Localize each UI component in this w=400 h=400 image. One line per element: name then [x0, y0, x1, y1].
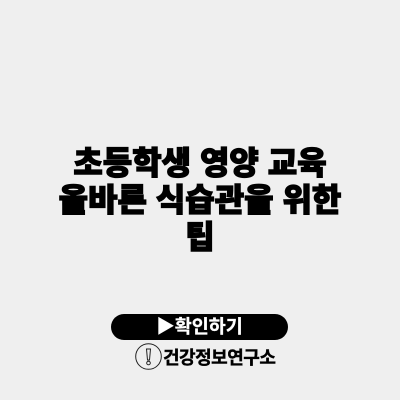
title: 올바른 식습관을 위한	[59, 182, 341, 218]
brand logo	[135, 343, 276, 370]
title	[59, 145, 342, 255]
title: 초등학생 영양 교육	[73, 145, 327, 181]
title: 팁	[185, 219, 215, 255]
brand name: 건강정보연구소	[163, 348, 275, 368]
icon: exclamation circle	[135, 343, 162, 370]
button: confirm	[111, 314, 288, 340]
button: confirm: ▶확인하기	[156, 316, 243, 337]
